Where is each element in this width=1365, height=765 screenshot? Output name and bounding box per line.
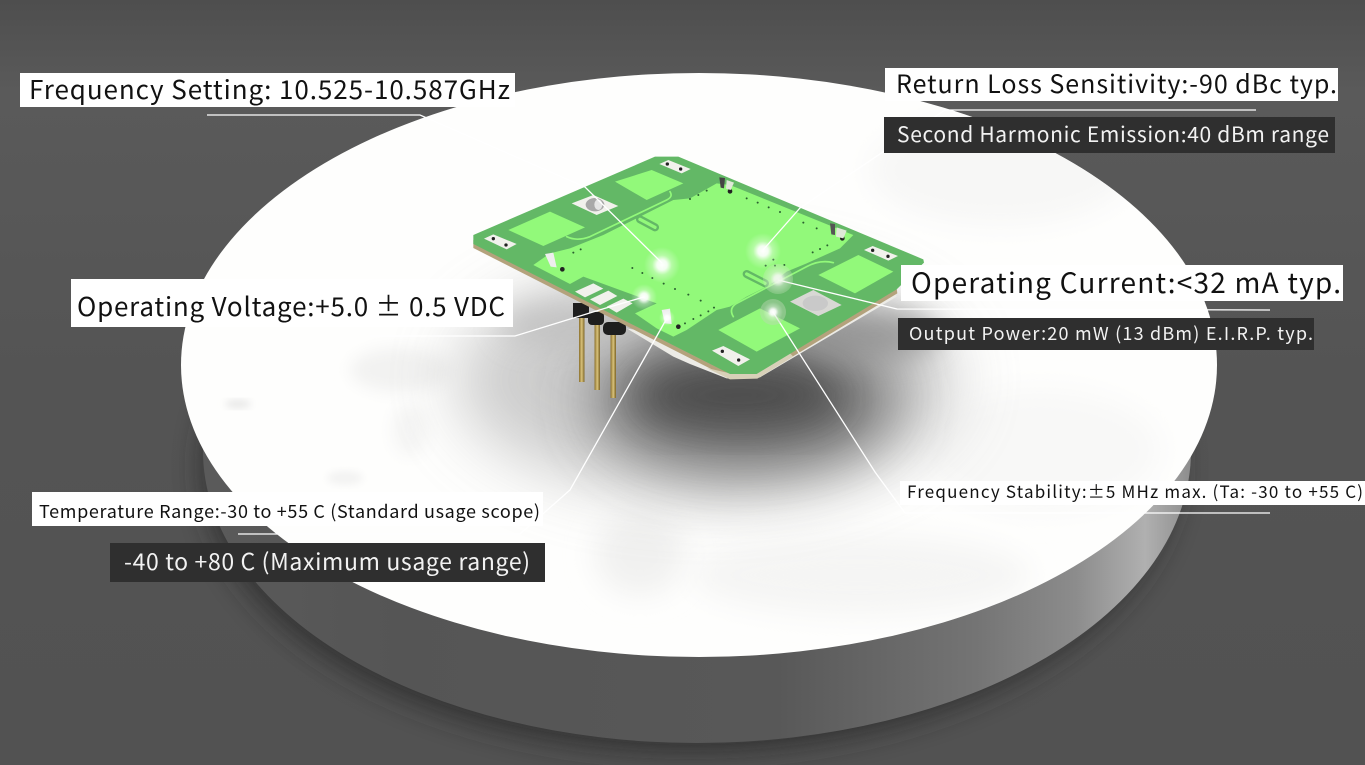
disc side wall <box>203 159 1191 743</box>
components <box>545 177 847 324</box>
label: frequency setting: Frequency Setting: 10.525-10.587GHz <box>29 70 510 107</box>
pad holes <box>492 162 890 362</box>
board edge <box>473 240 897 379</box>
disc platform <box>181 73 1217 743</box>
antenna patches <box>615 170 683 200</box>
disc cast shadow <box>202 180 1178 752</box>
label: operating voltage: Operating Voltage:+5.0 ± 0.5 VDC <box>77 287 505 324</box>
label: temperature range: Temperature Range:-30 to +55 C (Standard usage scope) <box>39 498 540 524</box>
feed traces <box>567 192 833 317</box>
leader line: return loss <box>763 110 1256 250</box>
leader line: operating voltage <box>370 297 644 336</box>
via dots <box>572 190 828 324</box>
solder pads <box>484 160 898 366</box>
screws <box>586 198 604 211</box>
label: operating current: Operating Current:<32 mA typ. <box>911 262 1341 302</box>
leader line: frequency stability <box>773 312 1270 513</box>
ground plane <box>533 183 853 337</box>
radar module <box>473 157 924 398</box>
surface cloud texture and board shadow <box>225 115 1160 615</box>
label: return loss sensitivity: Return Loss Sensitivity:-90 dBc typ. <box>896 65 1337 101</box>
label: maximum usage range: -40 to +80 C (Maximum usage range) <box>124 543 530 577</box>
label: frequency stability: Frequency Stability:±5 MHz max. (Ta: -30 to +55 C) <box>907 478 1363 503</box>
leader line: temperature range <box>238 318 667 534</box>
board top <box>473 157 924 374</box>
board underside <box>627 288 897 378</box>
label: second harmonic emission: Second Harmonic Emission:40 dBm range <box>897 119 1329 149</box>
header pins <box>573 303 626 398</box>
leader line: frequency setting <box>207 115 662 263</box>
leader line: operating current <box>778 280 1270 310</box>
glow markers <box>631 233 793 326</box>
disc top surface <box>181 73 1217 657</box>
label: output power: Output Power:20 mW (13 dBm) E.I.R.P. typ. <box>909 320 1313 346</box>
